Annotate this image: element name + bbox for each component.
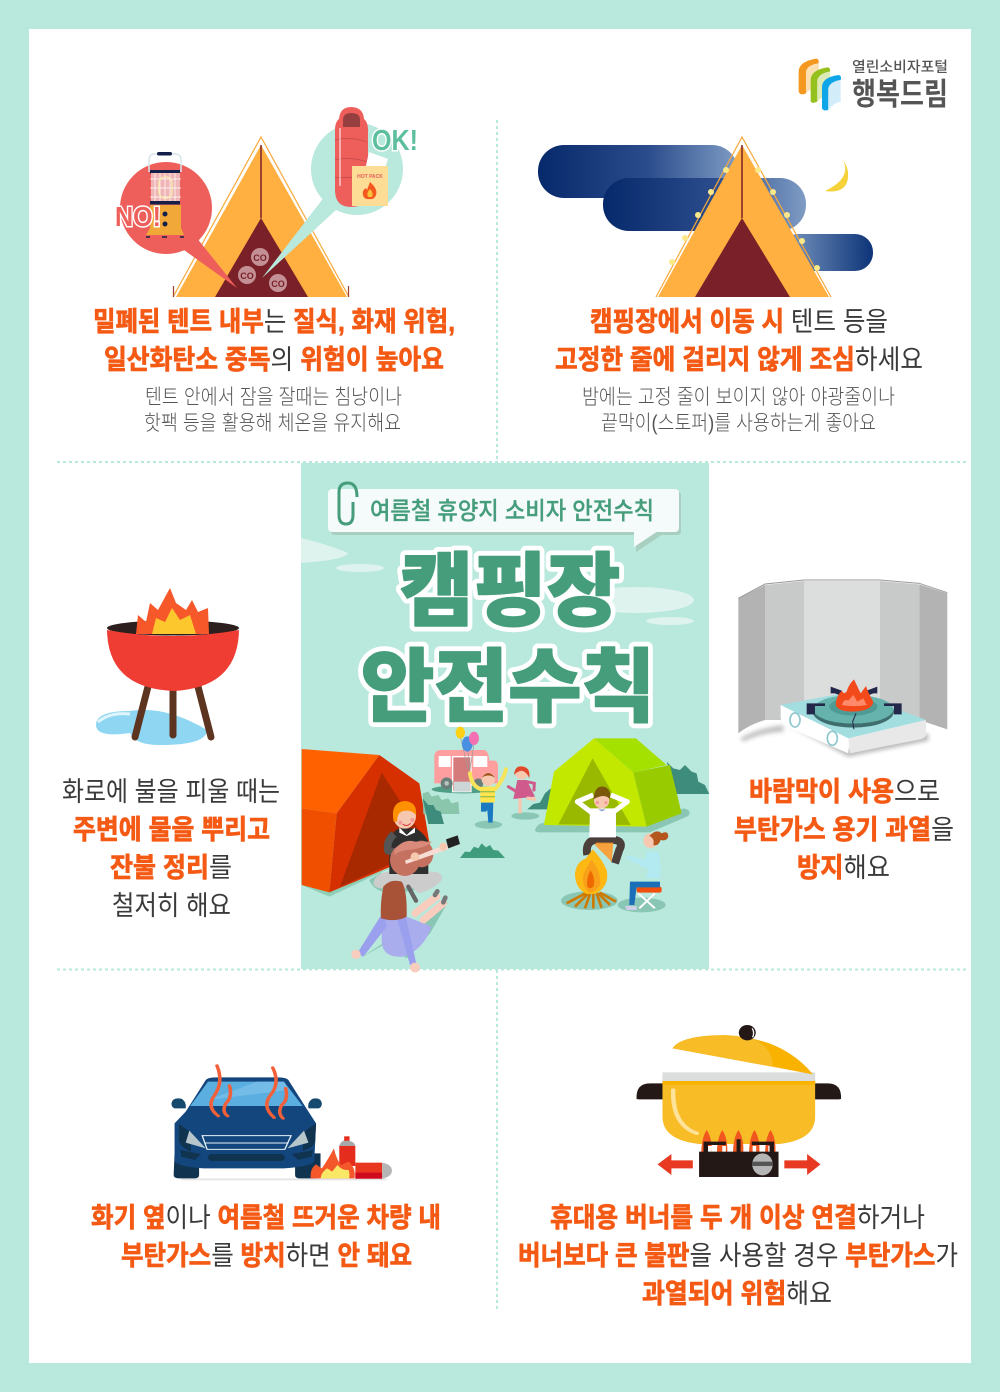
running girl: [508, 766, 539, 820]
illustration: campers: [302, 727, 709, 973]
clouds: [301, 538, 694, 625]
panel: windscreen stove: [734, 580, 954, 883]
text: 잔불 정리를: [110, 853, 232, 883]
campfire: [561, 849, 618, 910]
headline: 캠핑장에서 이동 시 텐트 등을: [590, 307, 888, 337]
text: [91, 1203, 441, 1271]
icon: sleeping bag and hot pack in mint circle: [262, 107, 403, 278]
text: 화로에 불을 피울 때는: [62, 777, 280, 807]
text: 철저히 해요: [112, 891, 231, 921]
icon: tent with lights: [656, 137, 831, 297]
icon: car, heat waves, gas cans and flame: [171, 1066, 392, 1179]
speech bubble subtitle: [328, 483, 681, 552]
icon: pot, burner and arrows: [637, 1025, 841, 1177]
text: 과열되어 위험해요: [642, 1279, 832, 1309]
panel: sealed tent warning: [93, 107, 455, 435]
text: 부탄가스를 방치하면 안 돼요: [121, 1241, 412, 1271]
note: 텐트 안에서 잠을 잘때는 침낭이나: [145, 386, 402, 409]
label: OK: OK!: [372, 125, 418, 157]
title: 캠핑장: [400, 547, 620, 636]
text: 화기 옆이나 여름철 뜨거운 차량 내: [91, 1203, 441, 1233]
text: 방지해요: [797, 853, 890, 883]
text: [62, 777, 280, 921]
panel: center title poster: [301, 463, 709, 973]
note: [582, 386, 895, 435]
man relaxing: [577, 786, 627, 863]
balloons: [456, 727, 479, 770]
text: 주변에 물을 뿌리고: [73, 815, 270, 845]
panel: car with gas cans: [91, 1066, 441, 1271]
note: 핫팩 등을 활용해 체온을 유지해요: [144, 412, 401, 435]
headline: [555, 307, 923, 375]
logo: 행복드림: [852, 77, 948, 112]
icon: heater in red circle: [120, 152, 237, 288]
text: [734, 777, 954, 883]
headline: 고정한 줄에 걸리지 않게 조심하세요: [555, 345, 923, 375]
text: [518, 1203, 958, 1309]
panel: night tent guy lines: [538, 137, 923, 435]
icon: tent with CO: CO: [253, 253, 267, 263]
icon: grill over wet ground: [96, 588, 239, 745]
title: [361, 547, 655, 732]
logo: 열린소비자포털: [852, 59, 948, 76]
icon: tent with CO: [173, 137, 349, 297]
green tent: [535, 738, 690, 832]
note: 밤에는 고정 줄이 보이지 않아 야광줄이나: [582, 386, 895, 409]
title: 안전수칙: [361, 643, 655, 732]
label: NO: NO!: [115, 201, 161, 232]
icon: moon: [825, 160, 848, 191]
icon: stove with windscreen: [738, 580, 949, 757]
headline: [93, 307, 455, 375]
text: 버너보다 큰 불판을 사용할 경우 부탄가스가: [518, 1241, 958, 1271]
title: 안전수칙: [361, 643, 655, 732]
guitar man: [369, 801, 460, 901]
note: [144, 386, 402, 435]
logo: [799, 59, 948, 112]
bushes: [423, 762, 709, 858]
woman on ground: [351, 881, 448, 973]
woman sitting: [618, 831, 668, 912]
icon: sleeping bag and hot pack in mint circle: HOT PACK: [357, 174, 383, 180]
text: 부탄가스 용기 과열을: [734, 815, 954, 845]
icon: tent with CO: CO: [271, 279, 285, 289]
camper van: [432, 750, 498, 793]
note: 끝막이(스토퍼)를 사용하는게 좋아요: [601, 412, 876, 435]
icon: tent with CO: CO: [240, 271, 254, 281]
text: 바람막이 사용으로: [749, 777, 940, 807]
icon: night clouds: [538, 145, 873, 271]
title: 캠핑장: [400, 547, 620, 636]
orange tent: [302, 749, 431, 897]
headline: 일산화탄소 중독의 위험이 높아요: [104, 345, 444, 375]
panel: pot on burner: [518, 1025, 958, 1309]
text: 휴대용 버너를 두 개 이상 연결하거나: [550, 1203, 925, 1233]
headline: 밀폐된 텐트 내부는 질식, 화재 위험,: [93, 307, 455, 337]
speech bubble subtitle: 여름철 휴양지 소비자 안전수칙: [370, 498, 654, 525]
panel: grill: [62, 588, 280, 921]
running boy: [470, 769, 506, 829]
